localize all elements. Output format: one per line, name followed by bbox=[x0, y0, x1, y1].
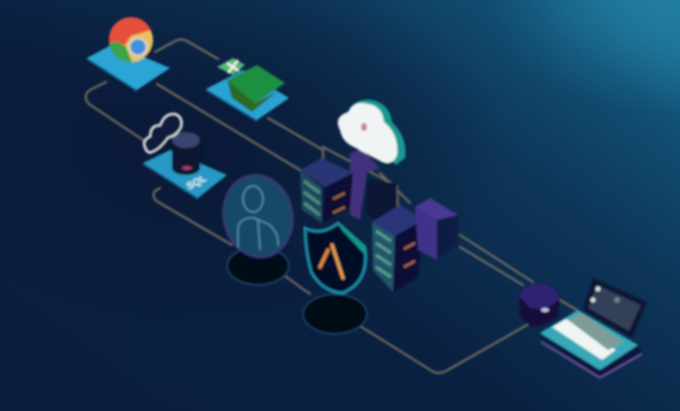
logo mark bbox=[320, 250, 328, 267]
servers bbox=[300, 150, 458, 292]
cloud bbox=[338, 100, 405, 165]
shield bbox=[305, 222, 368, 293]
platform: chrome bbox=[87, 44, 170, 90]
shield on pedestal bbox=[303, 222, 368, 334]
excel x badge bbox=[217, 58, 245, 75]
platform: excel bbox=[206, 70, 289, 120]
hub node bbox=[519, 283, 560, 326]
back server bbox=[350, 150, 397, 222]
sql label: SQL bbox=[185, 173, 208, 192]
excel sheet bbox=[227, 65, 285, 103]
cloud outline bbox=[144, 114, 182, 153]
left server bbox=[300, 158, 353, 223]
chrome icon on platform bbox=[87, 17, 170, 92]
pedestal bbox=[227, 247, 289, 285]
connector lines bbox=[86, 40, 577, 373]
illustration bbox=[86, 17, 647, 378]
purple block bbox=[415, 198, 458, 260]
chrome ball bbox=[109, 17, 153, 62]
laptop screen bbox=[583, 278, 647, 338]
person hologram on pedestal bbox=[216, 169, 300, 285]
hologram disc bbox=[216, 169, 300, 263]
laptop bbox=[540, 278, 647, 378]
right server bbox=[372, 205, 423, 292]
platform: sql bbox=[143, 150, 227, 198]
laptop base bbox=[540, 312, 642, 378]
pedestal bbox=[303, 294, 367, 334]
sql database on platform bbox=[143, 114, 227, 200]
database cylinder bbox=[172, 132, 200, 175]
excel icon on platform bbox=[206, 58, 289, 122]
